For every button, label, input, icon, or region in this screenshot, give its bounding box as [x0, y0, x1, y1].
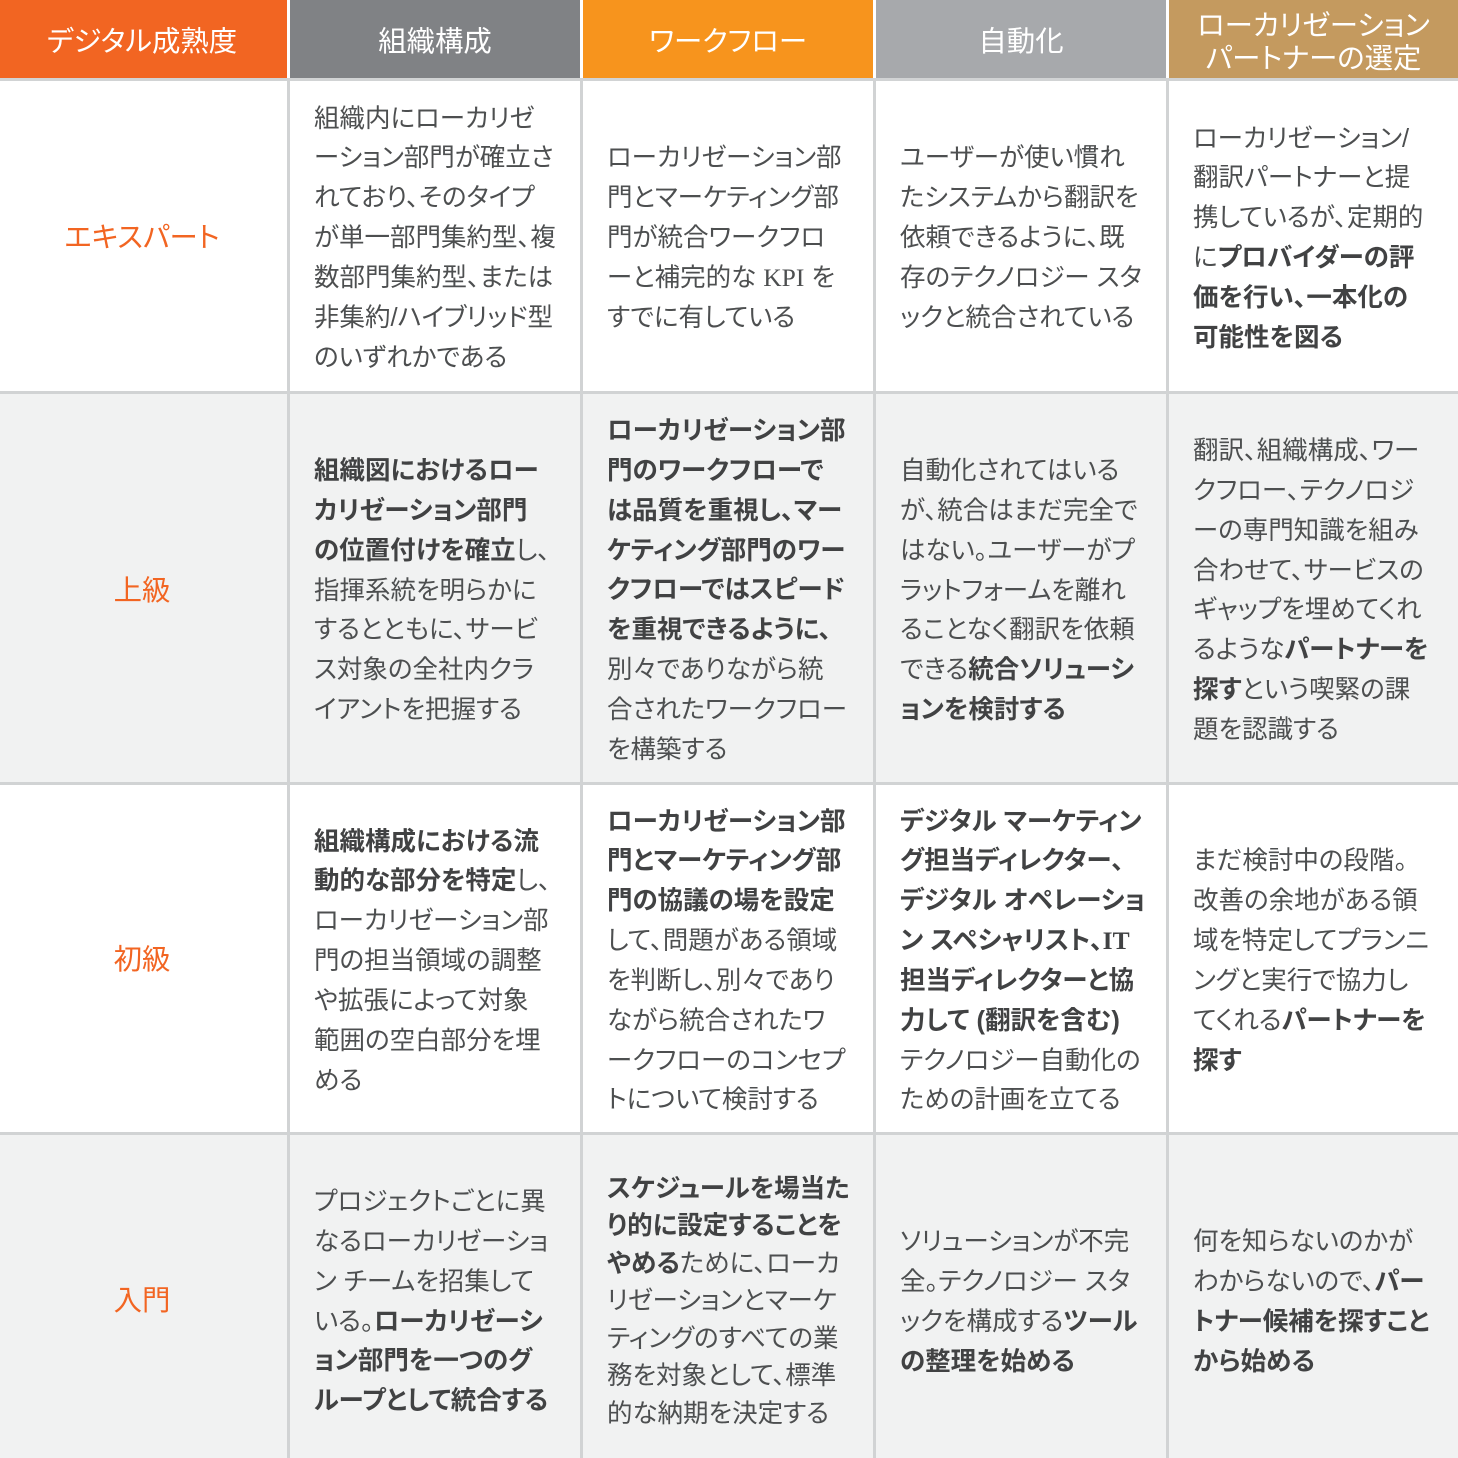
cell: 上級 / 組織構成 — [314, 457, 550, 724]
header: 組織構成: 組織構成 — [378, 26, 492, 58]
cell: 入門 / 自動化: ックを構成するツール — [900, 1308, 1138, 1336]
row label: 入門: 入門 — [114, 1285, 170, 1317]
header: デジタル成熟度: デジタル成熟度 — [47, 26, 237, 58]
cell: 入門 / パートナーの選定: 何を知らないのかが — [1193, 1228, 1413, 1256]
header: デジタル成熟度 — [0, 0, 287, 78]
cell: エキスパート / 自動化: ユーザーが使い慣れ — [900, 144, 1125, 172]
header: 自動化: 自動化 — [978, 26, 1064, 58]
cell: エキスパート / ワークフロー: 門が統合ワークフロ — [607, 224, 825, 252]
cell: 上級 / ワークフロー: ケティング部門のワー — [607, 537, 845, 565]
cell: 上級 / 自動化: ョンを検討する — [900, 696, 1066, 724]
cell: エキスパート / 自動化: たシステムから翻訳を — [900, 184, 1138, 212]
cell: 初級 / ワークフロー: ながら統合されたワ — [607, 1007, 825, 1035]
cell: 入門 / パートナーの選定: トナー候補を探すこと — [1193, 1308, 1429, 1336]
cell: 入門 / ワークフロー — [607, 1175, 850, 1428]
cell: 初級 / 組織構成: 範囲の空白部分を埋 — [314, 1027, 541, 1055]
cell: 入門 / ワークフロー: スケジュールを場当た — [607, 1175, 850, 1203]
cell: 上級 / パートナーの選定: ーの専門知識を組み — [1193, 517, 1419, 545]
cell: 初級 / ワークフロー: して、問題がある領域 — [607, 927, 837, 955]
cell: 初級 / 自動化: ための計画を立てる — [900, 1086, 1121, 1114]
cell: エキスパート / パートナーの選定: ローカリゼーション/ — [1193, 124, 1409, 152]
header: ローカリゼーションパートナーの選定 — [1169, 0, 1458, 78]
cell: エキスパート / 組織構成: 数部門集約型、または — [314, 264, 553, 292]
cell: 初級 / 組織構成: ローカリゼーション部 — [314, 907, 549, 935]
cell: エキスパート / パートナーの選定: にプロバイダーの評 — [1193, 244, 1414, 272]
header: ローカリゼーションパートナーの選定: パートナーの選定 — [1206, 42, 1421, 74]
cell: 上級 / パートナーの選定: 合わせて、サービスの — [1193, 557, 1424, 585]
header: ローカリゼーションパートナーの選定: ローカリゼーション — [1197, 10, 1430, 42]
cell: エキスパート / 自動化: 依頼できるように、既 — [900, 224, 1125, 252]
cell: 上級 / 自動化: ることなく翻訳を依頼 — [900, 616, 1135, 644]
cell: エキスパート / ワークフロー: 門とマーケティング部 — [607, 184, 839, 212]
cell: 上級 / パートナーの選定: クフロー、テクノロジ — [1193, 477, 1414, 505]
cell: 初級 / パートナーの選定: まだ検討中の段階。 — [1193, 847, 1407, 875]
cell: 上級 / パートナーの選定 — [1193, 437, 1428, 744]
cell: 上級 / ワークフロー: は品質を重視し、マー — [607, 497, 842, 525]
cell: 上級 / パートナーの選定: 翻訳、組織構成、ワー — [1193, 437, 1419, 465]
cell: エキスパート / 組織構成: のいずれかである — [314, 344, 507, 372]
cell: エキスパート / ワークフロー: ーと補完的な KPI を — [607, 263, 835, 292]
row label: エキスパート: エキスパート — [64, 222, 220, 254]
cell: 入門 / 組織構成: ン チームを招集して — [314, 1268, 534, 1296]
cell: エキスパート / パートナーの選定: 携しているが、定期的 — [1193, 204, 1423, 232]
cell: 上級 / 自動化: ラットフォームを離れ — [900, 577, 1126, 605]
cell: 初級 / パートナーの選定: ングと実行で協力し — [1193, 967, 1408, 995]
cell: 初級 / 自動化: テクノロジー自動化の — [900, 1047, 1141, 1075]
cell: 上級 / 自動化: はない。ユーザーがプ — [900, 537, 1135, 565]
cell: 初級 / 組織構成: 動的な部分を特定し、 — [314, 867, 551, 895]
cell: 入門 / 自動化 — [900, 1228, 1138, 1376]
cell: 上級 / 自動化 — [900, 457, 1138, 724]
cell: 上級 / 組織構成: 指揮系統を明らかに — [314, 577, 536, 605]
cell: 初級 / ワークフロー: 門とマーケティング部 — [607, 847, 841, 875]
cell: 入門 / ワークフロー: リゼーションとマーケ — [607, 1287, 837, 1315]
cell: エキスパート / パートナーの選定 — [1193, 124, 1423, 352]
cell: エキスパート / パートナーの選定: 翻訳パートナーと提 — [1193, 164, 1410, 192]
cell: 上級 / ワークフロー: 合されたワークフロー — [607, 696, 847, 724]
cell: エキスパート / 自動化: 存のテクノロジー スタ — [900, 264, 1142, 292]
cell: 初級 / 組織構成 — [314, 828, 551, 1095]
cell: エキスパート / 組織構成: れており、そのタイプ — [314, 184, 535, 212]
cell: 初級 / 自動化: 担当ディレクターと協 — [900, 967, 1134, 995]
cell: 初級 / パートナーの選定: 探す — [1193, 1047, 1241, 1075]
cell: 上級 / 自動化: 自動化されてはいる — [900, 457, 1119, 485]
cell: エキスパート / 組織構成: 組織内にローカリゼ — [314, 104, 534, 132]
cell: 上級 / 組織構成: するとともに、サービ — [314, 616, 538, 644]
cell: 入門 / ワークフロー: 的な納期を決定する — [607, 1400, 829, 1428]
row band: 上級 — [0, 391, 1458, 784]
cell: エキスパート / 組織構成: ーション部門が確立さ — [314, 144, 553, 172]
cell: 初級 / 組織構成: や拡張によって対象 — [314, 987, 529, 1015]
cell: 入門 / 組織構成 — [314, 1188, 548, 1415]
cell: 上級 / パートナーの選定: 題を認識する — [1193, 716, 1339, 744]
cell: 初級 / パートナーの選定: 改善の余地がある領 — [1193, 887, 1418, 915]
cell: 初級 / ワークフロー: ークフローのコンセプ — [607, 1047, 845, 1075]
cell: 初級 / 組織構成: める — [314, 1067, 362, 1095]
cell: 入門 / 自動化: 全。テクノロジー スタ — [900, 1268, 1130, 1296]
cell: 上級 / ワークフロー: クフローではスピード — [607, 576, 845, 604]
header: 自動化 — [876, 0, 1166, 78]
header: ワークフロー: ワークフロー — [649, 26, 807, 58]
cell: 上級 / 組織構成: イアントを把握する — [314, 696, 522, 724]
row band: 入門 — [0, 1132, 1458, 1458]
cell: エキスパート / 組織構成: が単一部門集約型、複 — [314, 224, 556, 252]
cell: エキスパート / 自動化 — [900, 144, 1142, 332]
cell: 入門 / 組織構成: いる。ローカリゼーシ — [314, 1308, 543, 1336]
cell: 入門 / 組織構成: ョン部門を一つのグ — [314, 1347, 532, 1375]
cell: 初級 / ワークフロー: トについて検討する — [607, 1086, 819, 1114]
cell: 上級 / ワークフロー: を構築する — [607, 736, 727, 764]
cell: 入門 / パートナーの選定: から始める — [1193, 1348, 1315, 1376]
cell: 初級 / 自動化: デジタル オペレーショ — [900, 887, 1145, 915]
cell: エキスパート / 組織構成: 非集約/ハイブリッド型 — [314, 304, 553, 332]
cell: 入門 / 自動化: ソリューションが不完 — [900, 1228, 1129, 1256]
cell: 初級 / 自動化: 力して (翻訳を含む) — [900, 1007, 1120, 1035]
cell: エキスパート / 自動化: ックと統合されている — [900, 304, 1134, 332]
cell: 上級 / ワークフロー: ローカリゼーション部 — [607, 417, 845, 445]
cell: 上級 / ワークフロー: 別々でありながら統 — [607, 656, 823, 684]
header: 組織構成 — [290, 0, 580, 78]
cell: エキスパート / ワークフロー: ローカリゼーション部 — [607, 144, 842, 172]
cell: 入門 / パートナーの選定 — [1193, 1228, 1429, 1376]
cell: 上級 / パートナーの選定: ギャップを埋めてくれ — [1193, 596, 1421, 624]
cell: 上級 / ワークフロー: を重視できるように、 — [607, 616, 831, 644]
cell: 入門 / ワークフロー: ティングのすべての業 — [607, 1325, 838, 1353]
cell: 初級 / 組織構成: 組織構成における流 — [314, 828, 539, 856]
cell: 入門 / 組織構成: なるローカリゼーショ — [314, 1228, 548, 1256]
cell: エキスパート / ワークフロー — [607, 144, 842, 332]
cell: 初級 / 自動化: グ担当ディレクター、 — [900, 847, 1124, 875]
cell: 初級 / パートナーの選定 — [1193, 847, 1429, 1075]
cell: 上級 / ワークフロー: 門のワークフローで — [607, 457, 824, 485]
cell: 入門 / ワークフロー: 務を対象として、標準 — [607, 1362, 836, 1390]
cell: 初級 / ワークフロー — [607, 808, 846, 1114]
cell: エキスパート / パートナーの選定: 可能性を図る — [1193, 324, 1343, 352]
cell: 入門 / 自動化: の整理を始める — [900, 1348, 1075, 1376]
cell: エキスパート / ワークフロー: すでに有している — [607, 304, 795, 332]
cell: 初級 / 自動化: ン スペシャリスト、IT — [900, 926, 1130, 955]
cell: 初級 / ワークフロー: を判断し、別々であり — [607, 967, 835, 995]
cell: 入門 / 組織構成: ループとして統合する — [314, 1387, 548, 1415]
cell: 初級 / 自動化 — [900, 808, 1145, 1114]
cell: エキスパート / パートナーの選定: 価を行い、一本化の — [1193, 284, 1408, 312]
cell: 入門 / ワークフロー: やめるために、ローカ — [607, 1250, 840, 1278]
cell: 入門 / 組織構成: プロジェクトごとに異 — [314, 1188, 546, 1216]
cell: 初級 / 自動化: デジタル マーケティン — [900, 808, 1142, 836]
cell: 初級 / パートナーの選定: てくれるパートナーを — [1193, 1007, 1426, 1035]
cell: 上級 / パートナーの選定: 探すという喫緊の課 — [1193, 676, 1410, 704]
cell: 上級 / ワークフロー — [607, 416, 847, 764]
cell: 初級 / ワークフロー: 門の協議の場を設定 — [607, 887, 835, 915]
row label: 初級: 初級 — [114, 944, 170, 976]
cell: 入門 / ワークフロー: り的に設定することを — [607, 1212, 842, 1240]
row label: 上級: 上級 — [114, 575, 170, 607]
cell: 上級 / 自動化: できる統合ソリューシ — [900, 656, 1134, 684]
cell: エキスパート / 組織構成 — [314, 104, 556, 372]
cell: 初級 / ワークフロー: ローカリゼーション部 — [607, 808, 845, 836]
cell: 上級 / 組織構成: カリゼーション部門 — [314, 497, 527, 525]
cell: 上級 / 組織構成: ス対象の全社内クラ — [314, 656, 534, 684]
cell: 上級 / 自動化: が、統合はまだ完全で — [900, 497, 1138, 525]
cell: 初級 / 組織構成: 門の担当領域の調整 — [314, 947, 542, 975]
header: ワークフロー — [583, 0, 873, 78]
cell: 入門 / パートナーの選定: わからないので、パー — [1193, 1268, 1424, 1296]
cell: 上級 / パートナーの選定: るようなパートナーを — [1193, 636, 1428, 664]
cell: 上級 / 組織構成: 組織図におけるロー — [314, 457, 539, 485]
cell: 初級 / パートナーの選定: 域を特定してプランニ — [1193, 927, 1429, 955]
cell: 上級 / 組織構成: の位置付けを確立し、 — [314, 537, 550, 565]
